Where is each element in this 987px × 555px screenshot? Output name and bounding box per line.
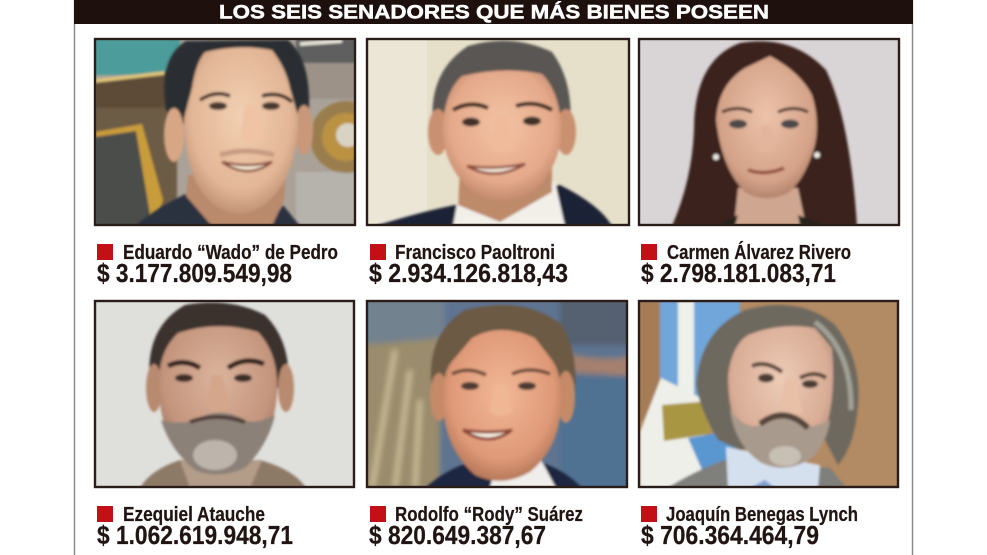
amount: $ 820.649.387,67: [369, 520, 546, 550]
bullet: [97, 244, 113, 260]
photo: Francisco Paoltroni: [367, 39, 629, 226]
name: Carmen Álvarez Rivero: [667, 241, 851, 264]
title bar: [74, 0, 913, 24]
photo: Rodolfo Suárez: [360, 295, 632, 495]
panel: Rodolfo Suárez: [360, 295, 632, 550]
bullet: [370, 506, 386, 522]
panel: Carmen Álvarez Rivero: [639, 39, 899, 288]
amount: $ 706.364.464,79: [641, 520, 819, 550]
name: Francisco Paoltroni: [395, 241, 555, 264]
amount: $ 3.177.809.549,98: [97, 258, 292, 288]
amount: $ 2.934.126.818,43: [369, 258, 568, 288]
amount: $ 2.798.181.083,71: [641, 258, 836, 288]
photo: Eduardo de Pedro: [95, 39, 382, 228]
name: Joaquín Benegas Lynch: [666, 503, 858, 526]
name: Rodolfo “Rody” Suárez: [395, 503, 583, 526]
bullet: [641, 244, 657, 260]
photo: Carmen Álvarez Rivero: [639, 39, 899, 226]
bullet: [97, 506, 113, 522]
panel: Francisco Paoltroni: [367, 39, 629, 288]
bullet: [641, 506, 657, 522]
name: Ezequiel Atauche: [123, 503, 265, 526]
photo: Joaquín Benegas Lynch: [639, 301, 898, 490]
panel: Ezequiel Atauche: [95, 301, 354, 550]
photo: Ezequiel Atauche: [95, 301, 354, 488]
amount: $ 1.062.619.948,71: [97, 520, 293, 550]
panel: Joaquín Benegas Lynch: [639, 301, 898, 550]
bullet: [370, 244, 386, 260]
title: LOS SEIS SENADORES QUE MÁS BIENES POSEEN: [219, 2, 769, 24]
name: Eduardo “Wado” de Pedro: [123, 241, 338, 264]
panel: Eduardo de Pedro: [95, 39, 382, 288]
